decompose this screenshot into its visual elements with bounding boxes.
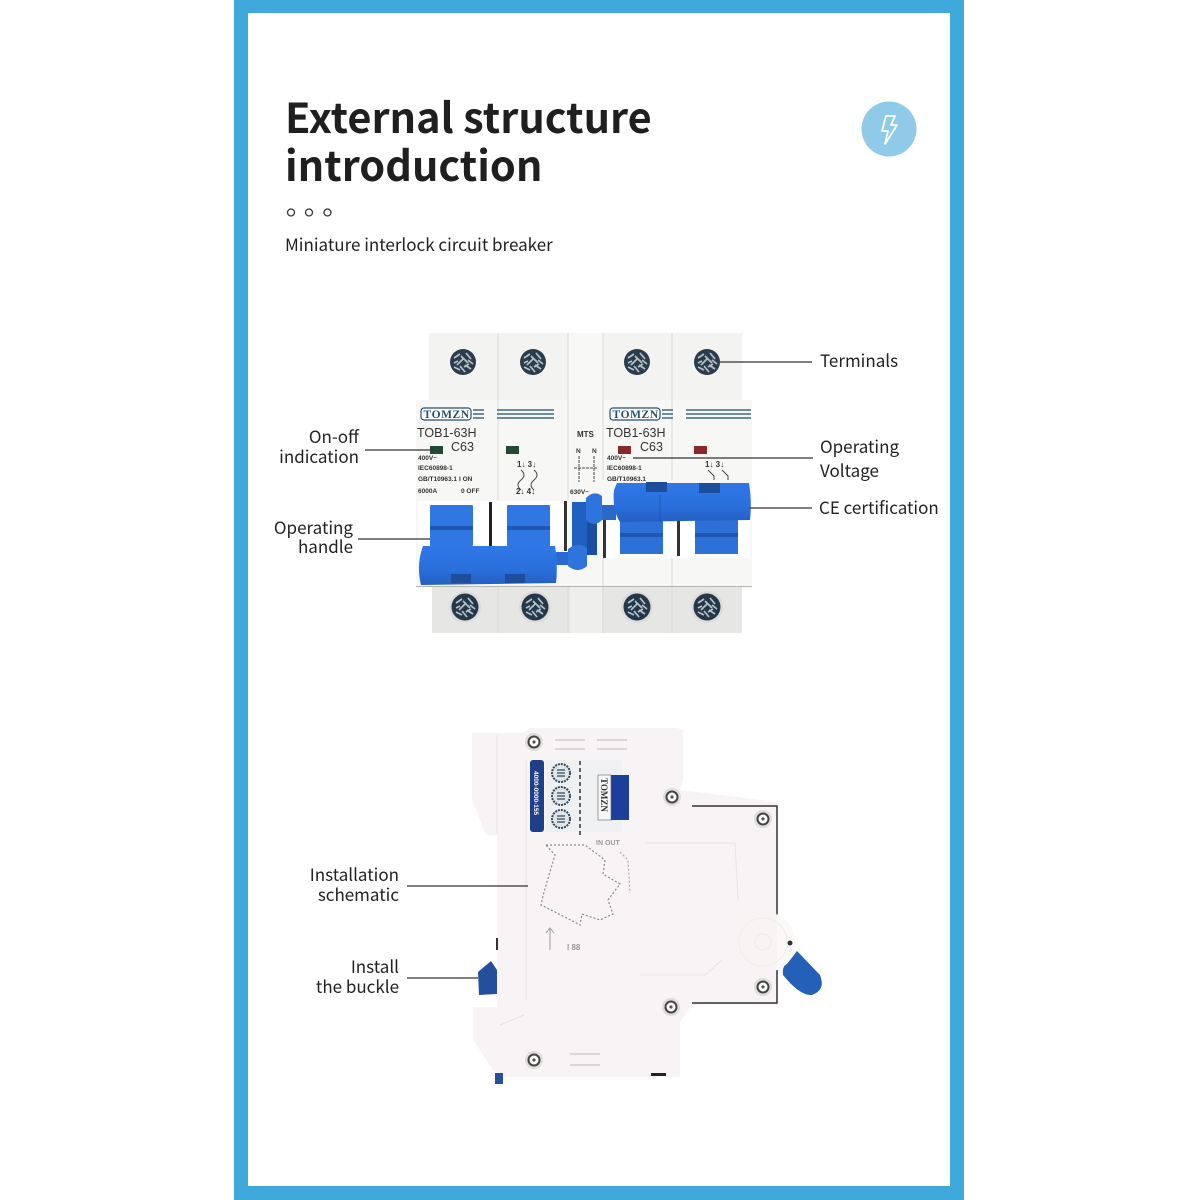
- model text and indicators: IEC60898-1: [418, 465, 453, 472]
- label: Operating Voltage: Operating: [820, 433, 899, 458]
- model text and indicators: IEC60898-1: [607, 465, 642, 472]
- label: Operating handle: Operating: [274, 514, 353, 539]
- model text and indicators: 400V~: [418, 455, 437, 462]
- title: [285, 85, 652, 193]
- label: Operating Voltage: Voltage: [820, 457, 879, 482]
- label: On-off indication: [279, 423, 431, 468]
- installation schematic: [541, 840, 630, 952]
- label sticker: [530, 760, 629, 835]
- model text and indicators: 2↓ 4↓: [516, 487, 535, 496]
- title: introduction: [285, 133, 542, 193]
- housing outline details: [497, 735, 787, 1025]
- front view: interlock circuit breaker: [416, 333, 752, 633]
- label: CE certification: CE certification: [819, 494, 939, 519]
- brand plates: TOMZN: [424, 409, 470, 421]
- model text and indicators: I ON: [459, 476, 473, 483]
- label: Installation schematic: [310, 861, 528, 906]
- label: On-off indication: On-off: [309, 423, 360, 448]
- installation schematic: IN OUT: [596, 840, 620, 847]
- blue linking bars: [419, 482, 751, 585]
- icon: lightning bolt badge: [862, 102, 916, 156]
- model text and indicators: 400V~: [607, 455, 626, 462]
- terminal screws: [449, 349, 723, 623]
- side view: breaker profile: [472, 728, 822, 1084]
- page frame: [234, 0, 964, 1200]
- side housing: [472, 728, 777, 1077]
- housing screws: [525, 733, 772, 1069]
- label: Install the buckle: [316, 953, 478, 998]
- model text and indicators: GB/T10963.1: [607, 476, 646, 483]
- title: External structure: [285, 85, 652, 145]
- blue clips: [478, 938, 666, 1084]
- label: Installation schematic: Installation: [310, 861, 399, 886]
- label: Installation schematic: schematic: [318, 881, 399, 906]
- model text and indicators: 6000A: [418, 488, 437, 495]
- handle dial: [733, 911, 795, 973]
- label: Install the buckle: the buckle: [316, 973, 399, 998]
- label: Operating handle: handle: [298, 533, 353, 558]
- vent slots: [555, 740, 627, 1065]
- label sticker: TOMZN: [599, 778, 609, 812]
- subtitle: Miniature interlock circuit breaker: [285, 231, 553, 256]
- model text and indicators: N: [592, 448, 597, 455]
- model text and indicators: 630V~: [570, 489, 589, 496]
- label: On-off indication: indication: [279, 443, 359, 468]
- model text and indicators: MTS: [577, 430, 595, 439]
- breaker body: [416, 333, 752, 633]
- label: Operating Voltage: [633, 433, 899, 482]
- model text and indicators: 1↓ 3↓: [705, 460, 724, 469]
- model text and indicators: N: [576, 448, 581, 455]
- label: Install the buckle: Install: [351, 953, 399, 978]
- label sticker: 4000-0000-155: [532, 771, 539, 815]
- brand plates: [421, 408, 751, 421]
- label: Terminals: Terminals: [820, 347, 898, 372]
- model text and indicators: GB/T10963.1: [418, 476, 457, 483]
- handle recesses: [418, 501, 750, 558]
- side toggle: [783, 951, 822, 995]
- installation schematic: I 88: [567, 943, 581, 952]
- model text and indicators: TOB1-63H: [606, 426, 666, 440]
- three small dots: [288, 209, 331, 216]
- model text and indicators: C63: [451, 440, 474, 454]
- interlock knobs: [556, 493, 616, 570]
- operating handles: [430, 502, 738, 555]
- brand plates: TOMZN: [612, 409, 659, 421]
- label: Operating handle: [274, 514, 430, 558]
- model text and indicators: TOB1-63H: [417, 426, 477, 440]
- model text and indicators: 1↓ 3↓: [517, 460, 536, 469]
- model text and indicators: [417, 426, 728, 496]
- model text and indicators: C63: [640, 440, 663, 454]
- model text and indicators: 0 OFF: [461, 488, 479, 495]
